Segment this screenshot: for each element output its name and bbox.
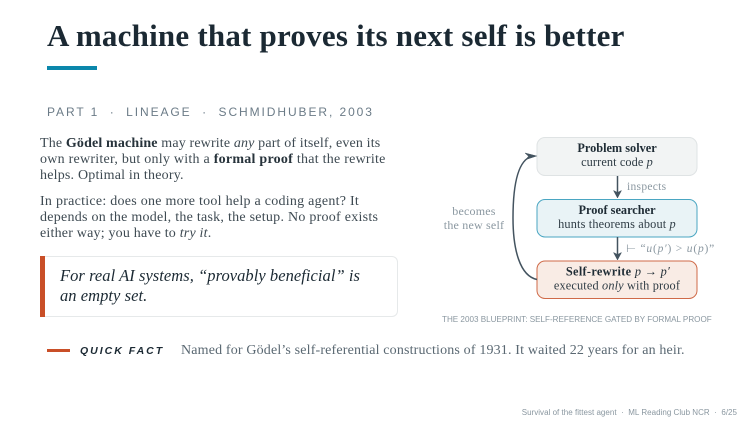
- loop label: becomes: [452, 204, 496, 218]
- section label: PART 1 · LINEAGE · SCHMIDHUBER, 2003: [47, 105, 374, 119]
- title accent bar: [47, 66, 97, 70]
- text block: Gödel machine description: own rewriter, but only with a formal proof that the rewrite: [40, 152, 386, 167]
- text block: in practice: [40, 194, 378, 241]
- text block: Gödel machine description: [40, 136, 386, 183]
- callout text: For real AI systems, “provably beneficial” is: [60, 266, 360, 285]
- loop label: the new self: [444, 218, 504, 232]
- text block: in practice: depends on the model, the task, the setup. No proof exists: [40, 210, 378, 225]
- callout: [40, 256, 398, 317]
- arrow: inspects: inspects: [627, 181, 667, 193]
- box: problem solver: [537, 138, 697, 176]
- box: proof searcher: hunts theorems about p: [558, 217, 676, 231]
- diagram caption: THE 2003 BLUEPRINT: SELF-REFERENCE GATED BY FORMAL PROOF: [442, 315, 712, 324]
- arrow: inspects: [614, 176, 667, 198]
- text block: Gödel machine description: The Gödel machine may rewrite any part of itself, even its: [40, 136, 380, 151]
- box: self-rewrite: executed only with proof: [554, 278, 681, 292]
- arrow: proof condition: [614, 237, 715, 260]
- title: A machine that proves its next self is better: [47, 18, 625, 53]
- callout text: [60, 266, 360, 305]
- quick fact text: Named for Gödel’s self-referential constructions of 1931. It waited 22 years for an heir.: [181, 343, 685, 358]
- loop label: [444, 204, 504, 232]
- callout text: an empty set.: [60, 286, 147, 305]
- box: self-rewrite: [537, 261, 697, 298]
- box: self-rewrite: Self-rewrite p → p′: [566, 264, 670, 278]
- text block: in practice: either way; you have to try it.: [40, 226, 211, 241]
- quick fact dash: [47, 349, 70, 352]
- box: problem solver: current code p: [581, 155, 653, 169]
- callout accent bar: [40, 256, 45, 317]
- text block: Gödel machine description: helps. Optimal in theory.: [40, 168, 184, 183]
- arrow: proof condition: ⊢ “u(p′) > u(p)”: [626, 243, 715, 255]
- quick fact: [47, 343, 685, 358]
- box: problem solver: Problem solver: [577, 141, 657, 155]
- box: proof searcher: [537, 200, 697, 237]
- footer: Survival of the fittest agent · ML Reading Club NCR · 6/25: [522, 408, 737, 417]
- text block: in practice: In practice: does one more tool help a coding agent? It: [40, 194, 359, 209]
- box: proof searcher: Proof searcher: [578, 203, 656, 217]
- quick fact label: QUICK FACT: [80, 345, 164, 357]
- arrow: feedback loop: [513, 153, 537, 280]
